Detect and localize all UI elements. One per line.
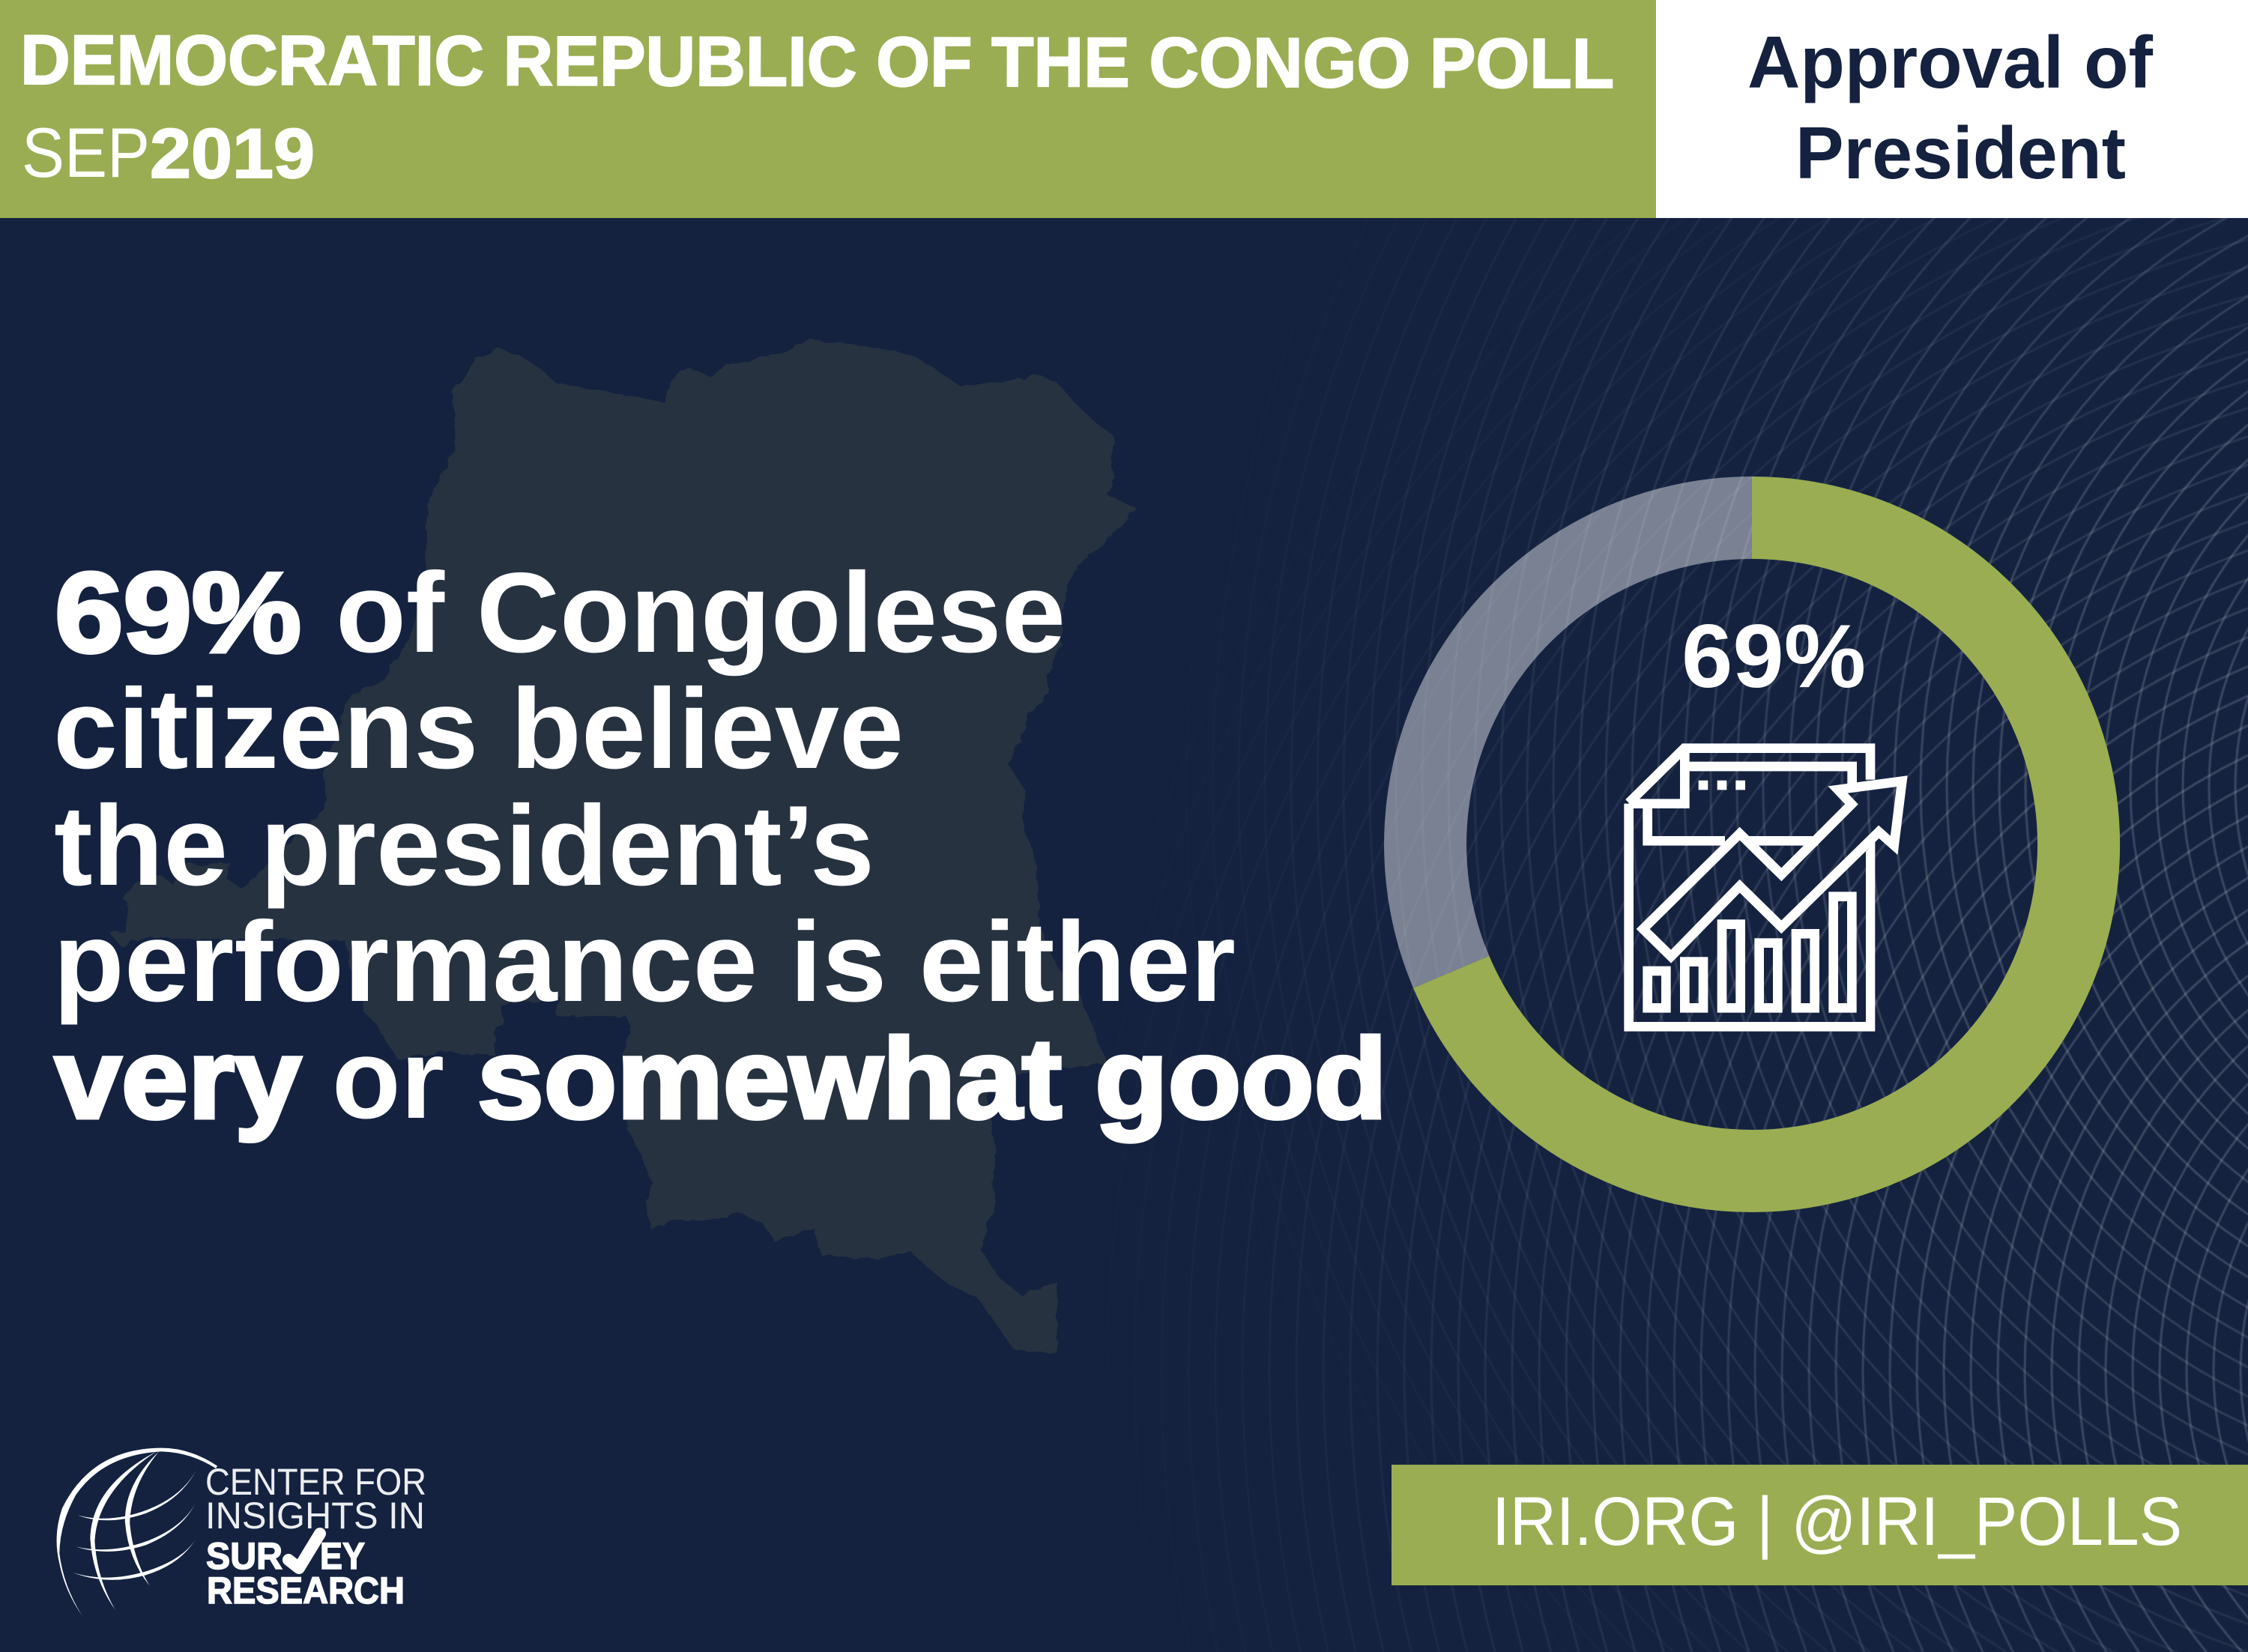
main statement: or [332, 1015, 444, 1143]
footer band: website and handle: IRI.ORG | @IRI_POLLS [1492, 1483, 2182, 1560]
main statement: 69% [55, 549, 301, 677]
poll date: 2019 [150, 114, 315, 193]
donut 69 percent segment [1451, 518, 2079, 1171]
main statement: very [55, 1015, 301, 1143]
main statement: the president’s [54, 782, 874, 910]
header band: poll title [0, 0, 1656, 218]
logo wordmark: CENTER FOR [205, 1461, 426, 1503]
donut chart: 69 percent approval [1425, 518, 2079, 1171]
poll date [22, 113, 315, 193]
logo check mark [288, 1534, 320, 1568]
topic label: Approval of President [1656, 0, 2248, 218]
logo wordmark: INSIGHTS IN [205, 1495, 425, 1537]
main statement: performance is either [53, 898, 1236, 1026]
logo wordmark: SUR [206, 1535, 282, 1577]
map: Democratic Republic of the Congo silhouette [109, 340, 1136, 1353]
poll date: SEP [22, 113, 150, 192]
main statement [53, 549, 1387, 1143]
footer band: website and handle [1392, 1465, 2248, 1585]
logo wordmark [205, 1461, 426, 1612]
topic label: Approval of President: President [1795, 112, 2126, 194]
logo globe [57, 1448, 217, 1616]
donut value label: 69% [1682, 606, 1866, 707]
heading: poll name: DEMOCRATIC REPUBLIC OF THE CONGO POLL [20, 20, 1614, 103]
main statement: somewhat good [477, 1015, 1387, 1143]
logo: Center for Insights in Survey Research [57, 1448, 426, 1616]
logo wordmark: RESEARCH [207, 1570, 405, 1612]
main statement: citizens believe [53, 665, 904, 793]
donut remainder segment [1425, 518, 1752, 972]
logo wordmark: EY [320, 1535, 365, 1577]
main statement: of Congolese [336, 549, 1066, 677]
topic label: Approval of President: Approval of [1747, 21, 2153, 103]
icon: report with rising arrow and bars [1629, 748, 1902, 1032]
